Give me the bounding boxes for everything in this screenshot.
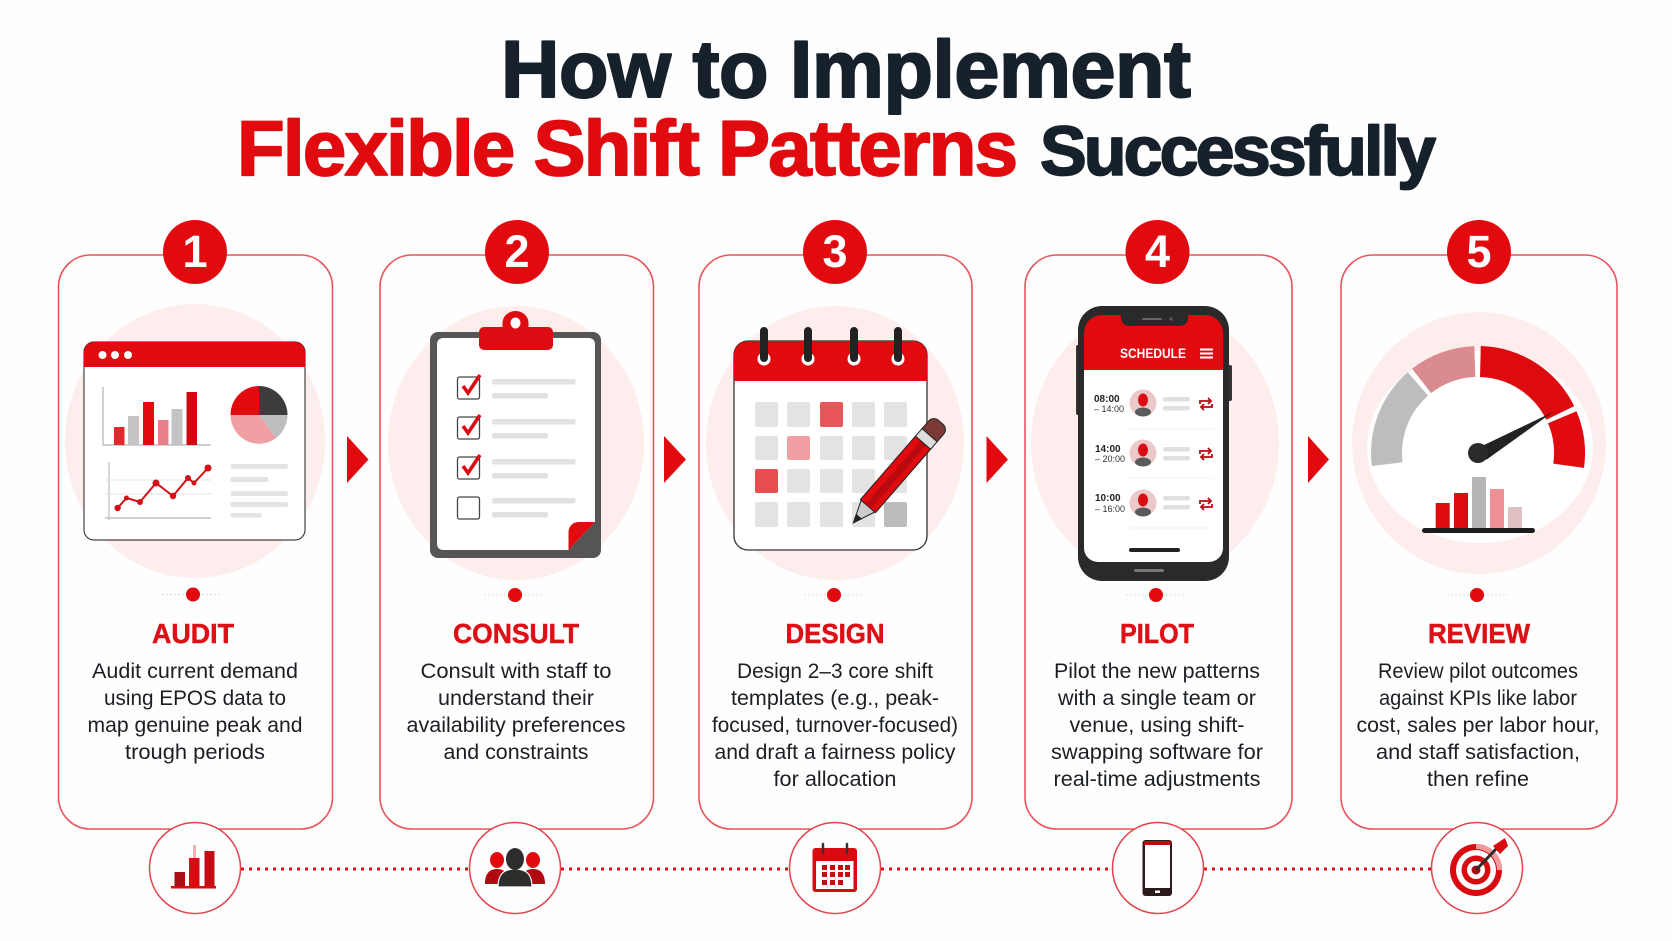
icon: clipboard checklist <box>430 311 601 558</box>
icon: calendar with pencil <box>734 331 948 550</box>
bottom icon: team <box>470 822 560 914</box>
icon: smartphone schedule app: 08:00 <box>1094 394 1120 405</box>
panel: review <box>1341 220 1617 829</box>
step badge 2 <box>485 220 549 284</box>
description: audit <box>88 659 302 764</box>
dotted timeline connector <box>241 868 1432 870</box>
icon: smartphone schedule app: 14:00 <box>1095 444 1121 455</box>
step badge 4: 4 <box>1145 226 1170 277</box>
description: design: Design 2–3 core shift <box>737 659 933 683</box>
heading: review: REVIEW <box>1428 618 1531 649</box>
panel: design <box>699 220 972 829</box>
description: review: and staff satisfaction, <box>1376 740 1580 764</box>
heading: consult: CONSULT <box>453 618 579 649</box>
bottom icon: target with dart <box>1432 822 1522 914</box>
description: design: templates (e.g., peak- <box>731 686 939 710</box>
heading: design: DESIGN <box>786 618 884 649</box>
description: review: against KPIs like labor <box>1379 686 1577 710</box>
description: pilot: swapping software for <box>1051 740 1263 764</box>
description: consult: understand their <box>438 686 594 710</box>
description: audit: Audit current demand <box>92 659 298 683</box>
description: audit: trough periods <box>125 740 265 764</box>
arrow 4 <box>1308 436 1329 483</box>
heading: audit: AUDIT <box>152 618 234 649</box>
description: consult: and constraints <box>444 740 588 764</box>
divider dot <box>1126 588 1187 602</box>
description: pilot <box>1051 659 1263 791</box>
description: design: and draft a fairness policy <box>714 740 956 764</box>
divider dot <box>1447 588 1508 602</box>
description: consult: Consult with staff to <box>420 659 612 683</box>
title: Successfully <box>1040 112 1436 190</box>
description: review <box>1356 659 1600 791</box>
panel: consult <box>380 220 654 829</box>
step badge 5 <box>1447 220 1511 284</box>
description: pilot: Pilot the new patterns <box>1054 659 1260 683</box>
step badge 2: 2 <box>504 226 530 277</box>
panel: audit <box>58 220 332 829</box>
description: review: cost, sales per labor hour, <box>1356 713 1600 737</box>
arrow 1 <box>347 436 368 483</box>
step badge 1 <box>163 220 227 284</box>
description: pilot: venue, using shift- <box>1070 713 1244 737</box>
description: pilot: real-time adjustments <box>1054 767 1260 791</box>
description: design <box>712 659 958 791</box>
step badge 5: 5 <box>1466 226 1492 277</box>
step badge 1: 1 <box>182 226 208 277</box>
icon: smartphone schedule app <box>1076 306 1232 581</box>
icon: smartphone schedule app: – 16:00 <box>1095 504 1125 514</box>
divider dot <box>804 588 865 602</box>
description: pilot: with a single team or <box>1057 686 1256 710</box>
step badge 4 <box>1126 220 1190 284</box>
description: design: for allocation <box>774 767 896 791</box>
description: audit: map genuine peak and <box>88 713 302 737</box>
description: consult <box>406 659 626 764</box>
icon: analytics dashboard window <box>84 342 305 540</box>
heading: pilot: PILOT <box>1120 618 1194 649</box>
title <box>237 25 1436 192</box>
description: consult: availability preferences <box>406 713 626 737</box>
description: review: then refine <box>1427 767 1529 791</box>
panel: pilot <box>1025 220 1292 829</box>
bottom icon: phone <box>1112 822 1204 914</box>
icon: performance gauge <box>1371 346 1585 533</box>
bottom icon: bar chart <box>150 822 240 914</box>
description: review: Review pilot outcomes <box>1378 659 1578 683</box>
step badge 3 <box>803 220 867 284</box>
arrow 3 <box>986 436 1008 483</box>
icon: smartphone schedule app: – 20:00 <box>1095 454 1125 464</box>
title: Flexible Shift Patterns <box>237 104 1018 192</box>
divider dot <box>484 588 545 602</box>
description: design: focused, turnover-focused) <box>712 713 958 737</box>
title: How to Implement <box>501 25 1191 115</box>
icon: smartphone schedule app: SCHEDULE <box>1120 346 1186 361</box>
icon: smartphone schedule app: 10:00 <box>1095 493 1121 504</box>
description: audit: using EPOS data to <box>104 686 286 710</box>
bottom icon: calendar <box>790 822 880 914</box>
divider dot <box>162 588 221 602</box>
arrow 2 <box>664 436 686 483</box>
step badge 3: 3 <box>822 226 848 277</box>
icon: smartphone schedule app: – 14:00 <box>1094 404 1124 414</box>
